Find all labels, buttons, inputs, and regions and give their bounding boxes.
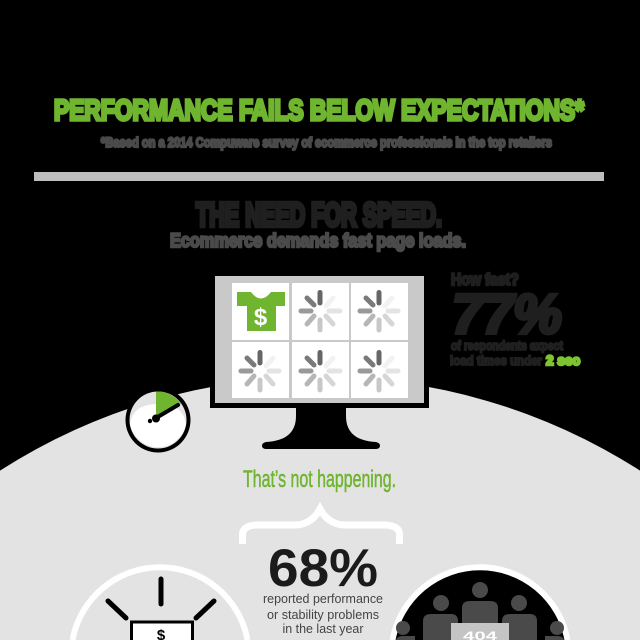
divider bar [34,172,604,181]
stat caption line 2: load times under [450,353,542,368]
icon: green shirt [237,292,285,331]
caption line 3: in the last year [282,622,364,636]
stat number: 77% [452,282,562,345]
curly brace [242,509,400,544]
monitor frame [210,271,429,408]
caption line 2: or stability problems [267,608,379,622]
subheading: Ecommerce demands fast page loads. [170,231,466,252]
monitor stand [262,406,380,449]
tile: spinner 4 [292,342,349,398]
stat caption [263,592,383,636]
icon: monitor with loading tiles [210,271,429,449]
grey background dome [0,377,640,640]
icon: alarm with lost revenue [72,567,248,640]
stat highlight: 2 sec [546,352,580,368]
heading: that's not happening: That’s not happening. [243,466,396,493]
icon: people with 404 error [392,567,568,640]
tile: product shirt [232,283,289,340]
tile: spinner 2 [351,283,408,340]
subtitle footnote: *Based on a 2014 Compuware survey of ecommerce professionals in the top retailers [101,135,552,150]
tile: spinner 3 [232,342,289,398]
tile: spinner 1 [292,283,349,340]
revenue box [132,622,192,640]
heading: the need for speed: THE NEED FOR SPEED. [196,196,442,233]
monitor screen [215,276,424,403]
stat caption line 1: of respondents expect [451,338,564,353]
error box [451,623,509,640]
tile: spinner 5 [351,342,408,398]
stat lead-in: How fast? [451,270,519,289]
icon: stopwatch gauge [126,388,190,452]
dollar sign: $ [254,304,268,331]
caption line 1: reported performance [263,592,383,606]
stat: 77 percent expect fast pages [450,270,580,368]
stat number: 68 percent: 68% [268,539,378,598]
